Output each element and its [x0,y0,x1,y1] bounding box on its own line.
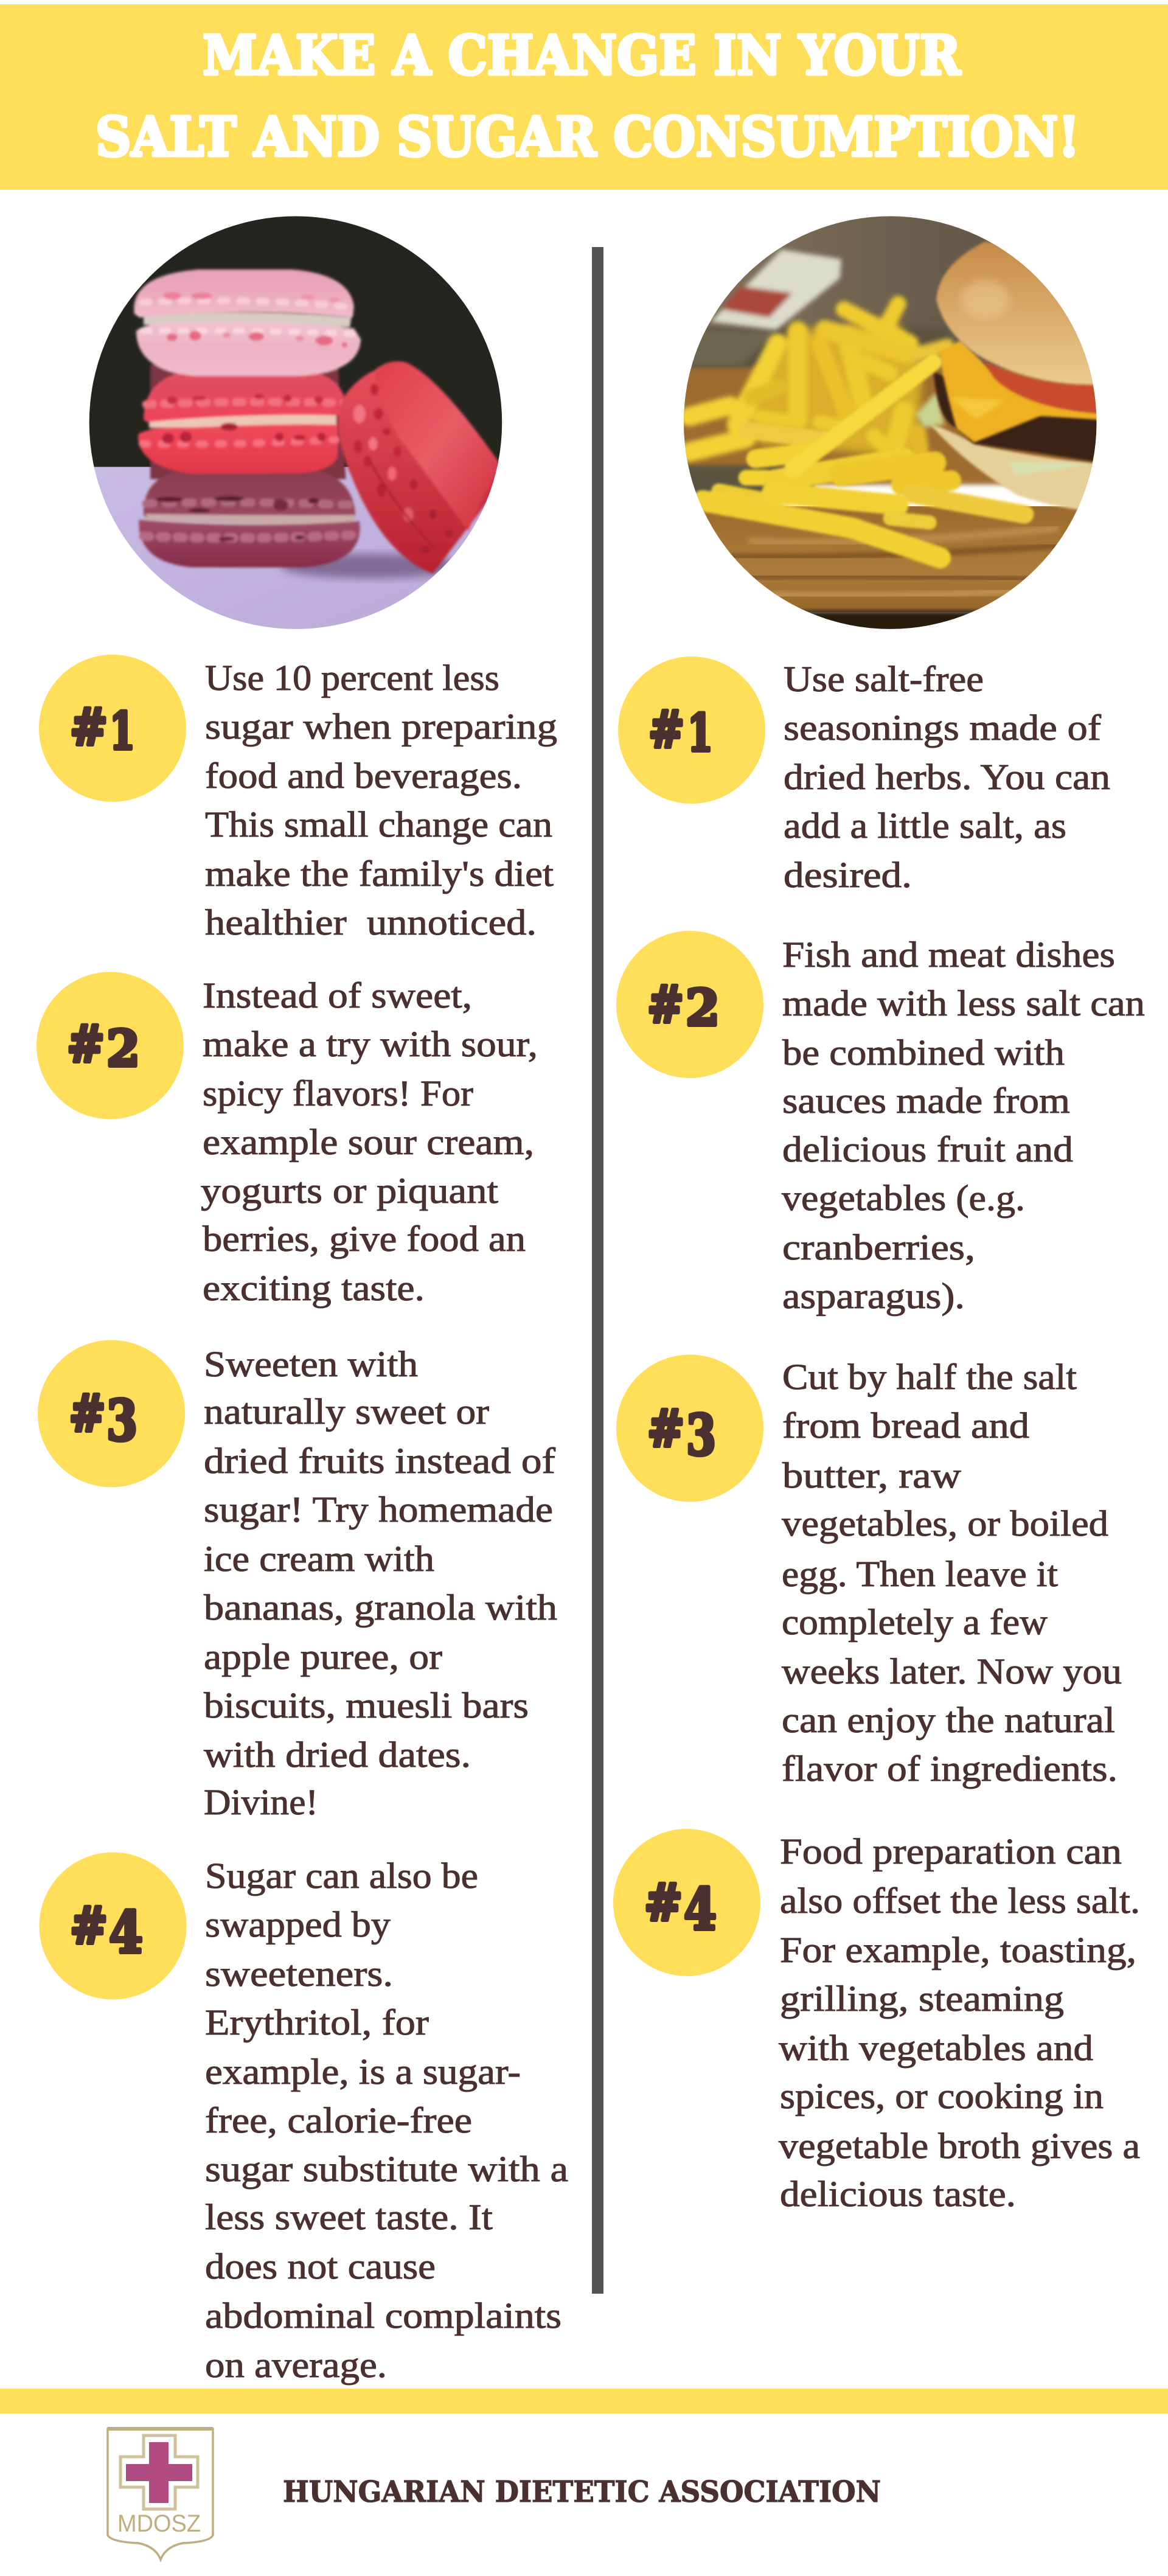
salt tip 1 text: seasonings made of [784,708,1101,748]
tip 3 text: apple puree, or [204,1637,442,1677]
badge 3: 3 [106,1388,137,1453]
salt tip 2 text: sauces made from [782,1081,1070,1121]
salt tip 4 text: with vegetables and [779,2028,1093,2068]
panel: sugar tips [36,655,568,2385]
wooden board [701,506,1079,629]
title [96,23,1080,169]
salt tip 4 text: spices, or cooking in [780,2076,1104,2116]
salt tip 2 text: made with less salt can [782,983,1145,1023]
sauce dish [689,249,841,365]
tip 4 text: does not cause [205,2246,436,2286]
salt tip 2 [616,931,1145,1316]
fries mass [732,322,923,458]
photo: fries and burger [678,213,1104,635]
tip 1 text [205,658,557,942]
tip 1 text: healthier unnoticed. [205,902,537,942]
salt tip 2 text: Fish and meat dishes [782,935,1115,975]
tip 2 text: spicy flavors! For [203,1073,473,1113]
tip 4 text: sweeteners. [205,1954,393,1994]
tip 2 text: exciting taste. [203,1268,425,1308]
badge 2 [36,972,184,1119]
salt tip 1 text: add a little salt, as [784,806,1066,846]
badge 1: # [70,697,108,757]
salt tip 3 text: can enjoy the natural [782,1700,1115,1740]
salt tip 2 text [782,935,1145,1316]
tip 2 text: make a try with sour, [203,1024,538,1064]
salt tip 1 [618,656,1110,895]
title: MAKE A CHANGE IN YOUR [203,23,961,87]
maroon macaron [144,467,355,520]
salt badge 3: # [647,1398,684,1458]
tip 3 text: bananas, granola with [204,1587,557,1627]
title: SALT AND SUGAR CONSUMPTION! [96,105,1080,169]
tip 1 text: sugar when preparing [205,706,557,747]
salt badge 2: 2 [686,979,720,1037]
tip 2 [36,972,538,1308]
salt tip 3 text: completely a few [782,1602,1048,1642]
red macaron [149,414,336,429]
salt tip 2 text: be combined with [782,1032,1065,1073]
header banner [0,4,1168,190]
salt tip 3 text: vegetables, or boiled [782,1503,1108,1544]
footer band [0,2389,1168,2414]
tip 2 text: example sour cream, [203,1122,534,1162]
tip 3 text [204,1344,557,1822]
salt tip 1 text [784,659,1110,895]
salt badge 1: 1 [687,703,713,763]
tip 1 text: This small change can [205,804,552,844]
salt tip 4 text [779,1831,1140,2214]
tip 4 text: abdominal complaints [205,2296,561,2336]
tip 3 text: sugar! Try homemade [204,1489,553,1530]
salt tip 3 text: flavor of ingredients. [782,1749,1118,1789]
tip 1 [39,655,557,942]
salt badge 3 [616,1354,763,1502]
badge 1: 1 [109,701,135,761]
badge 1 [39,655,186,802]
tip 3 text: naturally sweet or [204,1391,489,1432]
salt badge 2: # [647,974,684,1034]
tip 4 [39,1852,568,2385]
badge 3: # [69,1383,106,1443]
tip 4 text: example, is a sugar- [205,2052,521,2092]
pink macaron [144,312,351,327]
salt badge 1 [618,656,765,804]
badge 3 [38,1340,185,1487]
tip 4 text: Sugar can also be [205,1856,478,1896]
tip 4 text: swapped by [205,1904,391,1944]
salt badge 2 [616,931,763,1078]
salt tip 2 text: cranberries, [782,1227,975,1267]
salt tip 3 [616,1354,1122,1789]
tip 4 text: Erythritol, for [205,2002,429,2042]
tip 3 text: dried fruits instead of [204,1441,555,1481]
badge 2: 2 [106,1020,140,1078]
tip 3 text: Sweeten with [204,1344,418,1384]
salt tip 3 text: Cut by half the salt [782,1357,1077,1397]
tip 1 text: food and beverages. [205,756,522,796]
badge 4 [39,1852,186,1999]
salt tip 3 text: weeks later. Now you [782,1651,1122,1691]
panel: salt tips [613,656,1145,2214]
salt tip 4 text: also offset the less salt. [780,1881,1140,1921]
salt badge 4: 4 [684,1876,717,1943]
logo: MDOSZ shield: MDOSZ [117,2510,201,2537]
tip 3 [38,1340,557,1822]
tip 2 text: Instead of sweet, [203,975,472,1015]
tip 2 text: berries, give food an [203,1219,526,1259]
salt tip 3 text: egg. Then leave it [782,1554,1058,1594]
salt tip 4 [613,1829,1140,2214]
salt tip 3 text [782,1357,1122,1789]
tip 4 text: free, calorie-free [205,2100,472,2140]
salt tip 4 text: grilling, steaming [780,1979,1064,2019]
tip 3 text: Divine! [204,1782,318,1822]
badge 4: 4 [109,1899,143,1966]
photo: stacked macarons [85,213,511,641]
salt tip 3 text: from bread and [782,1405,1029,1446]
salt tip 4 text: vegetable broth gives a [779,2126,1140,2166]
salt badge 4 [613,1829,760,1976]
tip 4 text: less sweet taste. It [205,2197,493,2237]
background fries [689,304,947,452]
salt tip 4 text: For example, toasting, [780,1930,1136,1970]
foreground fries [703,363,1024,558]
salt tip 4 text: delicious taste. [780,2174,1016,2214]
salt tip 1 text: dried herbs. You can [784,757,1110,797]
tip 4 text: sugar substitute with a [205,2149,568,2189]
salt tip 1 text: desired. [784,855,912,895]
tip 1 text: Use 10 percent less [205,658,499,698]
badge 2: # [67,1014,105,1074]
salt tip 1 text: Use salt-free [784,659,984,699]
badge 4: # [70,1895,108,1955]
leaning macaron [338,361,499,574]
salt tip 3 text: butter, raw [782,1455,962,1495]
divider [592,247,603,2294]
tip 1 text: make the family's diet [205,854,554,894]
salt tip 4 text: Food preparation can [780,1831,1122,1871]
burger [916,242,1102,512]
stack backing [150,365,346,479]
tip 3 text: ice cream with [204,1539,434,1579]
tip 3 text: with dried dates. [204,1735,471,1775]
tip 4 text [205,1856,568,2385]
tip 2 text [201,975,538,1308]
footer organisation name: HUNGARIAN DIETETIC ASSOCIATION [283,2475,881,2509]
tip 3 text: biscuits, muesli bars [204,1685,529,1725]
logo: MDOSZ shield [108,2429,213,2560]
salt badge 4: # [644,1872,683,1932]
salt badge 1: # [648,699,684,759]
salt tip 2 text: vegetables (e.g. [782,1178,1025,1218]
tip 4 text: on average. [205,2345,387,2385]
salt tip 2 text: asparagus). [782,1276,965,1316]
salt badge 3: 3 [686,1402,716,1468]
salt tip 2 text: delicious fruit and [782,1129,1073,1169]
tip 2 text: yogurts or piquant [201,1171,498,1211]
